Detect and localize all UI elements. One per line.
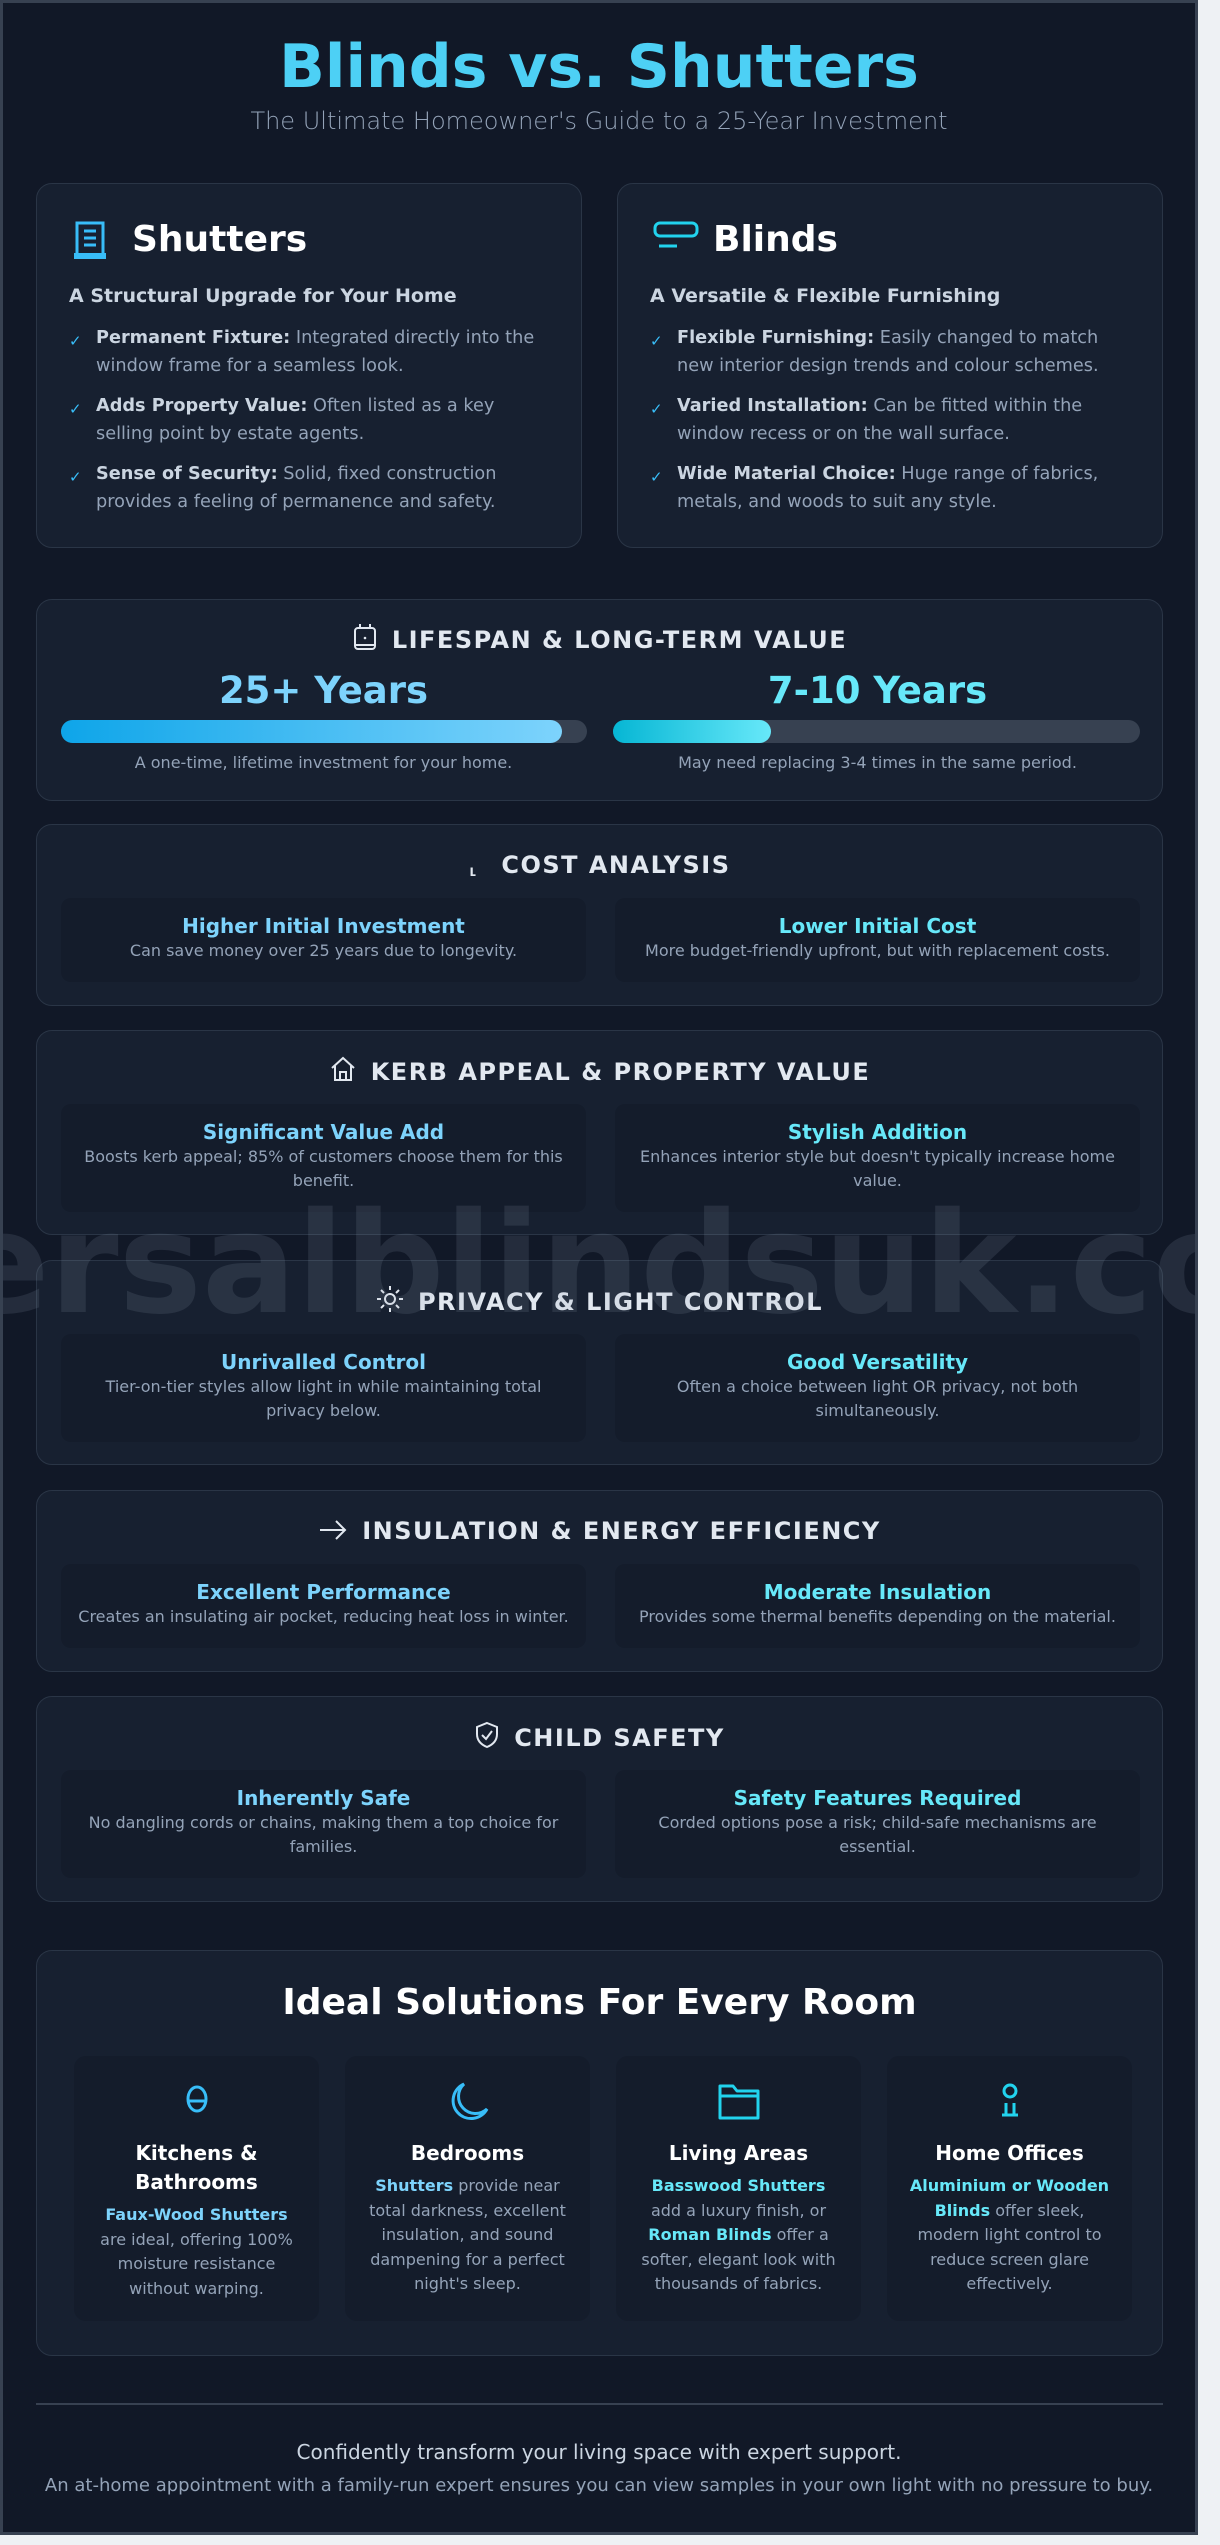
comparison: shutters: Can save money over 25 years due to longevity. xyxy=(130,941,517,960)
comparison: shutters xyxy=(61,1564,586,1648)
panel: lifespan xyxy=(36,599,1163,801)
panel: child safety xyxy=(36,1696,1163,1902)
bullet list: Adds Property Value: Often listed as a key xyxy=(96,396,494,416)
title: Blinds vs. Shutters xyxy=(279,32,919,102)
bullet list xyxy=(652,328,1099,512)
comparison: blinds: Enhances interior style but doesn't typically increase home value. xyxy=(640,1147,1115,1190)
comparison: shutters xyxy=(61,1770,586,1878)
icon: kitchen xyxy=(186,2086,208,2112)
panel: blinds: A Versatile & Flexible Furnishing xyxy=(650,285,1000,307)
comparison: blinds xyxy=(615,898,1140,982)
comparison: blinds: Provides some thermal benefits depending on the material. xyxy=(639,1607,1116,1626)
comparison: shutters: No dangling cords or chains, making them a top choice for families. xyxy=(89,1813,558,1856)
room: bedrooms xyxy=(345,2056,590,2321)
panel: insulation xyxy=(36,1490,1163,1672)
comparison: blinds: Often a choice between light OR privacy, not both simultaneously. xyxy=(677,1377,1078,1420)
comparison: blinds: Lower Initial Cost xyxy=(779,914,976,938)
comparison: blinds xyxy=(615,1770,1140,1878)
footer text xyxy=(45,2440,1153,2496)
bullet list: Flexible Furnishing: Easily changed to match new interior design trends and colour schemes. xyxy=(677,328,1099,376)
comparison: blinds xyxy=(615,1564,1140,1648)
comparison: blinds xyxy=(615,1104,1140,1212)
comparison: shutters: Unrivalled Control xyxy=(221,1350,426,1374)
comparison: shutters: Excellent Performance xyxy=(196,1580,451,1604)
panel: shutters xyxy=(36,183,582,548)
caption: A one-time, lifetime investment for your home. xyxy=(135,753,512,772)
comparison: blinds: Corded options pose a risk; child-safe mechanisms are essential. xyxy=(658,1813,1097,1856)
room: bedrooms: Shutters provide near total darkness, excellent insulation, and sound dampening for a perfect night's sleep. xyxy=(369,2176,566,2293)
heading: INSULATION & ENERGY EFFICIENCY xyxy=(362,1517,881,1545)
room: kitchens: are ideal, offering 100% moisture resistance without warping. xyxy=(100,2230,293,2298)
heading: Blinds xyxy=(713,219,838,260)
bullet list: Varied Installation: Can be fitted within the window recess or on the wall surface. xyxy=(677,396,1082,444)
room: living areas xyxy=(616,2056,861,2321)
room: living areas: Living Areas xyxy=(669,2141,808,2165)
heading: Shutters xyxy=(132,219,307,260)
room: kitchens xyxy=(74,2056,319,2321)
heading: Ideal Solutions For Every Room xyxy=(282,1982,917,2023)
comparison: blinds: More budget-friendly upfront, but with replacement costs. xyxy=(645,941,1110,960)
bullet list: Wide Material Choice: Huge range of fabrics, metals, and woods to suit any style. xyxy=(677,464,1098,512)
heading: ⸤ COST ANALYSIS xyxy=(468,851,731,879)
icon: moon xyxy=(452,2082,488,2120)
icon: shutter xyxy=(74,222,106,259)
heading: PRIVACY & LIGHT CONTROL xyxy=(418,1288,823,1316)
room: living areas: Basswood Shutters xyxy=(652,2176,825,2195)
icon: lamp xyxy=(1002,2084,1018,2116)
panel: kerb appeal xyxy=(36,1030,1163,1235)
footer text: An at-home appointment with a family-run expert ensures you can view samples in your own light with no pressure to buy. xyxy=(45,2475,1153,2496)
room: kitchens: Kitchens & xyxy=(135,2141,258,2165)
panel: rooms xyxy=(36,1950,1163,2356)
comparison: blinds: Moderate Insulation xyxy=(764,1580,991,1604)
panel: blinds xyxy=(617,183,1163,548)
bar: shutters xyxy=(61,720,587,743)
comparison: shutters: Inherently Safe xyxy=(237,1786,410,1810)
comparison: shutters: Significant Value Add xyxy=(203,1120,444,1144)
room: home offices: Aluminium or Wooden Blinds offer sleek, modern light control to reduce screen glare effectively. xyxy=(910,2176,1109,2293)
footer text: Confidently transform your living space with expert support. xyxy=(297,2440,901,2464)
comparison: blinds: Safety Features Required xyxy=(734,1786,1021,1810)
comparison: blinds xyxy=(615,1334,1140,1442)
bullet list: Permanent Fixture: Integrated directly into the window frame for a seamless look. xyxy=(96,328,534,376)
icon: folder xyxy=(718,2084,760,2120)
panel: shutters: A Structural Upgrade for Your Home xyxy=(69,285,457,307)
room: living areas: Roman Blinds offer a softer, elegant look with thousands of fabrics. xyxy=(641,2225,836,2293)
room: home offices: Home Offices xyxy=(935,2141,1084,2165)
bar: blinds xyxy=(613,720,1140,743)
bullet list: Sense of Security: Solid, fixed construction provides a feeling of permanence and safety. xyxy=(96,464,496,512)
comparison: shutters: Creates an insulating air pocket, reducing heat loss in winter. xyxy=(78,1607,569,1626)
panel: privacy xyxy=(36,1260,1163,1465)
room: bedrooms: Bedrooms xyxy=(411,2141,524,2165)
room: kitchens: Bathrooms xyxy=(135,2170,258,2194)
comparison: shutters xyxy=(61,1334,586,1442)
caption: May need replacing 3-4 times in the same period. xyxy=(678,753,1077,772)
comparison: shutters: Boosts kerb appeal; 85% of customers choose them for this benefit. xyxy=(84,1147,563,1190)
subtitle: The Ultimate Homeowner's Guide to a 25-Year Investment xyxy=(250,107,948,135)
room: living areas: add a luxury finish, or xyxy=(651,2200,826,2220)
comparison: shutters xyxy=(61,898,586,982)
comparison: blinds: Good Versatility xyxy=(787,1350,968,1374)
bullet list xyxy=(71,328,534,512)
room: kitchens: Faux-Wood Shutters xyxy=(105,2205,288,2224)
heading: CHILD SAFETY xyxy=(514,1724,725,1752)
bullet list: selling point by estate agents. xyxy=(96,424,364,444)
comparison: shutters: Tier-on-tier styles allow light in while maintaining total privacy below. xyxy=(106,1377,541,1420)
comparison: shutters: Higher Initial Investment xyxy=(182,914,465,938)
panel: cost xyxy=(36,824,1163,1006)
room: home offices xyxy=(887,2056,1132,2321)
comparison: shutters xyxy=(61,1104,586,1212)
stat: blinds lifespan: 7-10 Years xyxy=(768,669,987,712)
heading: KERB APPEAL & PROPERTY VALUE xyxy=(371,1058,870,1086)
icon: blind xyxy=(654,222,698,248)
heading: LIFESPAN & LONG-TERM VALUE xyxy=(392,626,847,654)
comparison: blinds: Stylish Addition xyxy=(788,1120,967,1144)
stat: shutters lifespan: 25+ Years xyxy=(219,669,428,712)
